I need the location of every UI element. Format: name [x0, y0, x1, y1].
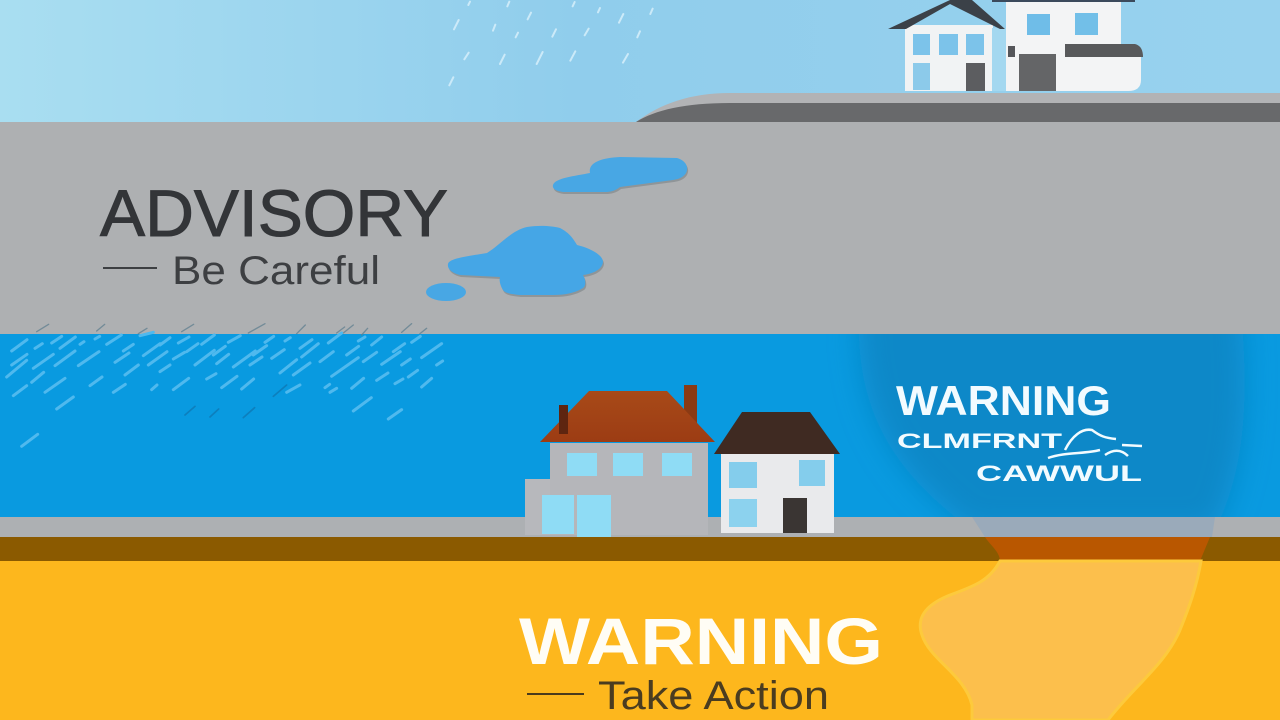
heading: advisory: ADVISORY — [100, 176, 448, 250]
puddle: small — [426, 283, 466, 301]
gray road strip — [0, 517, 1280, 538]
advisory band — [0, 122, 1280, 335]
heading: warning on water: WARNING — [896, 377, 1111, 424]
subheading: be careful: Be Careful — [172, 249, 380, 293]
house: lower left — [525, 385, 715, 537]
soil overlay orange — [985, 537, 1210, 561]
subheading: take action: Take Action — [598, 674, 829, 718]
warning zone shading — [854, 334, 1250, 517]
flood path overlay — [920, 561, 1201, 720]
sky band — [0, 0, 1280, 122]
yellow warning band — [0, 561, 1280, 720]
road strip overlay — [972, 517, 1215, 537]
house: upper right — [992, 0, 1143, 91]
puddle: large — [448, 226, 604, 297]
flood water band — [0, 334, 1280, 517]
road hill right — [636, 93, 1280, 122]
heavy rain over water — [7, 324, 443, 446]
garbled sub text on water — [897, 430, 1142, 486]
garbled sub text on water: CLMFRNT — [897, 430, 1062, 453]
house: lower right — [714, 412, 840, 533]
garbled sub text on water: CAWWUL — [976, 461, 1142, 486]
house: upper left — [888, 0, 1006, 91]
heading: warning on yellow: WARNING — [519, 604, 883, 678]
light rain in sky — [449, 2, 653, 85]
puddle: upper — [553, 157, 688, 194]
brown soil band — [0, 537, 1280, 561]
